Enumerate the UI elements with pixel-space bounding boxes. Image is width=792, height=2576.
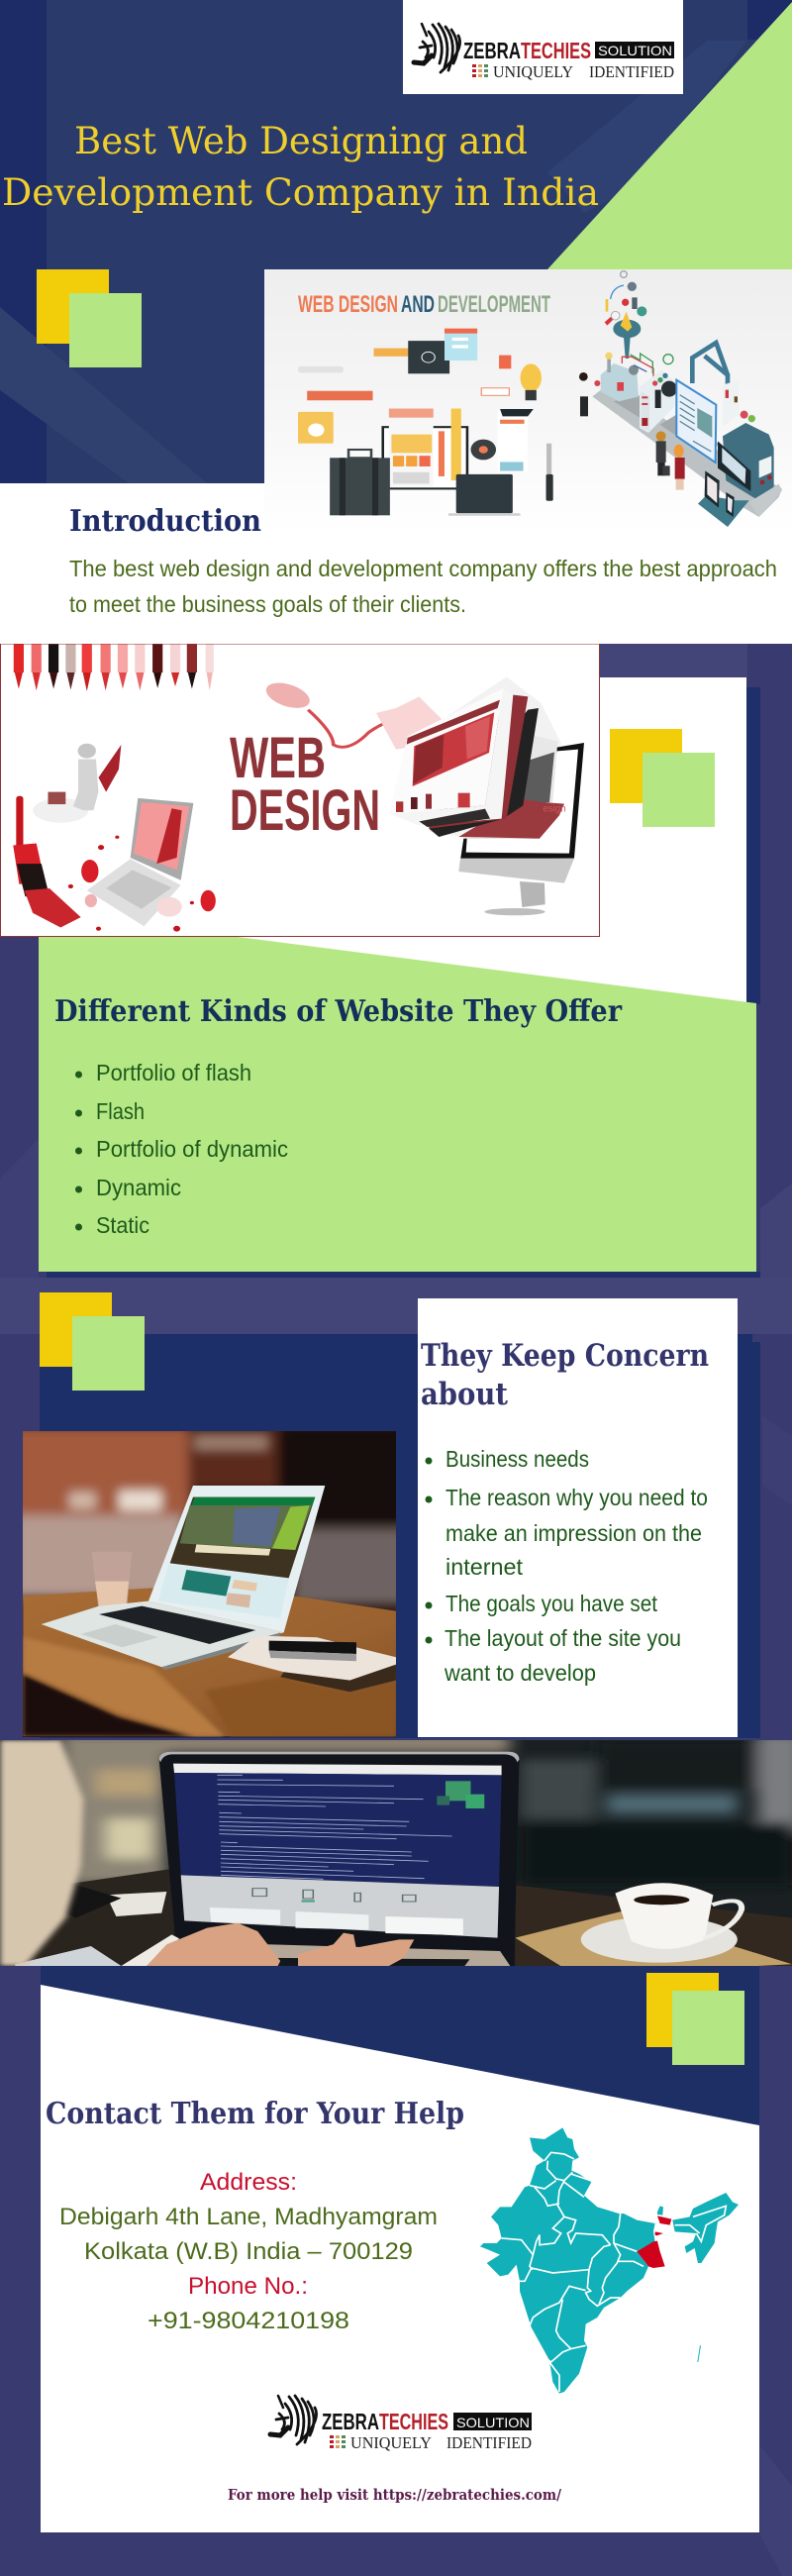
image: coding on laptop with coffee	[0, 1733, 792, 1966]
list: The reason why you need to	[446, 1485, 708, 1510]
list: Portfolio of dynamic	[96, 1136, 288, 1162]
list: internet	[446, 1554, 524, 1580]
desk	[30, 1870, 174, 1966]
decorative squares: contact	[646, 1973, 744, 2065]
state borders	[502, 2152, 726, 2392]
map of India	[480, 2127, 739, 2394]
heading: Contact Them for Your Help	[46, 2097, 464, 2131]
logo: top: SOLUTION	[598, 43, 672, 58]
document screen	[676, 380, 716, 463]
West Bengal highlight	[637, 2215, 671, 2268]
heading	[421, 1338, 709, 1412]
icon: zebra	[270, 2396, 317, 2444]
white band: introduction background	[0, 483, 792, 644]
introduction heading: Introduction	[69, 504, 261, 539]
logo wordmark: ZEBRA	[322, 2409, 379, 2434]
purple body background	[0, 644, 792, 2576]
navy band: contact	[41, 1966, 759, 2134]
device stand	[698, 495, 749, 527]
list: Static	[96, 1212, 149, 1238]
heading: They Keep Concern	[421, 1338, 709, 1374]
large machine	[723, 423, 774, 499]
address block: +91-9804210198	[148, 2308, 349, 2334]
introduction text: The best web design and development company offers the best approach	[69, 556, 777, 581]
logo: top	[403, 0, 683, 94]
logo: top: TECHIES	[521, 38, 591, 63]
side cards	[725, 382, 731, 408]
logo: footer: TECHIES	[379, 2409, 448, 2434]
header background	[0, 0, 792, 485]
green triangle	[547, 2, 792, 269]
address block: Address:	[200, 2169, 297, 2196]
blurred background	[13, 1426, 413, 1604]
laptop with red screen	[68, 798, 216, 932]
list: Portfolio of flash	[96, 1060, 251, 1085]
navy band: section 3	[40, 1334, 760, 1738]
list	[426, 1446, 708, 1686]
people	[579, 372, 685, 490]
address block: Phone No.:	[188, 2273, 308, 2300]
logo: footer: SOLUTION	[456, 2415, 530, 2430]
banner lettering: WEB	[230, 726, 326, 790]
decorative squares: header	[37, 269, 142, 367]
table	[23, 1588, 396, 1736]
floating icons	[605, 271, 646, 372]
monitor	[460, 743, 584, 860]
list: Business needs	[446, 1446, 589, 1472]
decorative squares: section 3	[40, 1292, 145, 1391]
address block	[59, 2169, 438, 2334]
pages and monitor	[376, 676, 584, 915]
panel: concerns	[418, 1298, 738, 1737]
hands	[121, 1923, 414, 1966]
image heading: AND	[401, 291, 435, 318]
heading: Different Kinds of Website They Offer	[54, 994, 623, 1029]
image heading: WEB DESIGN	[298, 291, 398, 318]
title: Best Web Designing and	[74, 120, 528, 162]
list: make an impression on the	[446, 1520, 702, 1546]
address block: Kolkata (W.B) India – 700129	[84, 2238, 413, 2265]
image: laptop on table	[13, 1426, 413, 1737]
funnel	[624, 337, 631, 359]
pages and monitor: esign	[543, 803, 566, 814]
decorative squares: section 2	[610, 729, 715, 827]
banner lettering: DESIGN	[230, 778, 380, 843]
image heading: DEVELOPMENT	[438, 291, 550, 318]
logo: footer: IDENTIFIED	[446, 2433, 532, 2452]
image heading	[298, 295, 550, 312]
title	[2, 120, 599, 214]
notebook and phone	[228, 1636, 396, 1692]
machine block one	[601, 363, 639, 401]
list: want to develop	[444, 1660, 596, 1686]
banner lettering	[230, 737, 378, 830]
list: Dynamic	[96, 1175, 181, 1200]
address block: Debigarh 4th Lane, Madhyamgram	[59, 2204, 438, 2230]
section panel: white back card	[238, 677, 760, 1006]
feather and smoke	[265, 683, 383, 749]
icon: zebra	[413, 22, 460, 72]
coffee cup	[581, 1883, 742, 1963]
list: Flash	[96, 1098, 145, 1124]
laptop	[159, 1752, 519, 1966]
blurred background	[60, 1733, 792, 1885]
wires	[622, 354, 653, 376]
paint brush	[13, 796, 81, 927]
list: The goals you have set	[446, 1591, 658, 1616]
glass	[92, 1552, 132, 1607]
back pages	[531, 736, 557, 802]
list	[75, 1060, 288, 1238]
person's head	[0, 1740, 83, 1966]
laptop	[42, 1486, 325, 1670]
image: web design and development illustration	[264, 269, 792, 532]
heading: about	[421, 1377, 509, 1412]
footer link text: For more help visit https://zebratechies.com/	[228, 2486, 561, 2504]
panel: website kinds	[39, 937, 760, 1278]
title: Development Company in India	[2, 171, 599, 214]
figure with bucket	[33, 744, 121, 823]
panel: contact	[41, 1985, 759, 2532]
machine block two	[640, 370, 675, 433]
logo: footer: UNIQUELY	[350, 2433, 432, 2452]
logo wordmark: ZEBRA	[463, 38, 521, 63]
introduction text: to meet the business goals of their clients.	[69, 591, 466, 617]
introduction text	[69, 556, 777, 617]
image: web design banner	[0, 644, 600, 937]
machine illustration	[579, 271, 782, 527]
markers	[14, 644, 214, 691]
list: The layout of the site you	[445, 1625, 681, 1651]
robot arm	[690, 339, 731, 384]
front page	[405, 689, 503, 810]
logo: top: IDENTIFIED	[589, 62, 674, 81]
logo: top: UNIQUELY	[493, 62, 573, 81]
logo: footer	[270, 2396, 532, 2452]
